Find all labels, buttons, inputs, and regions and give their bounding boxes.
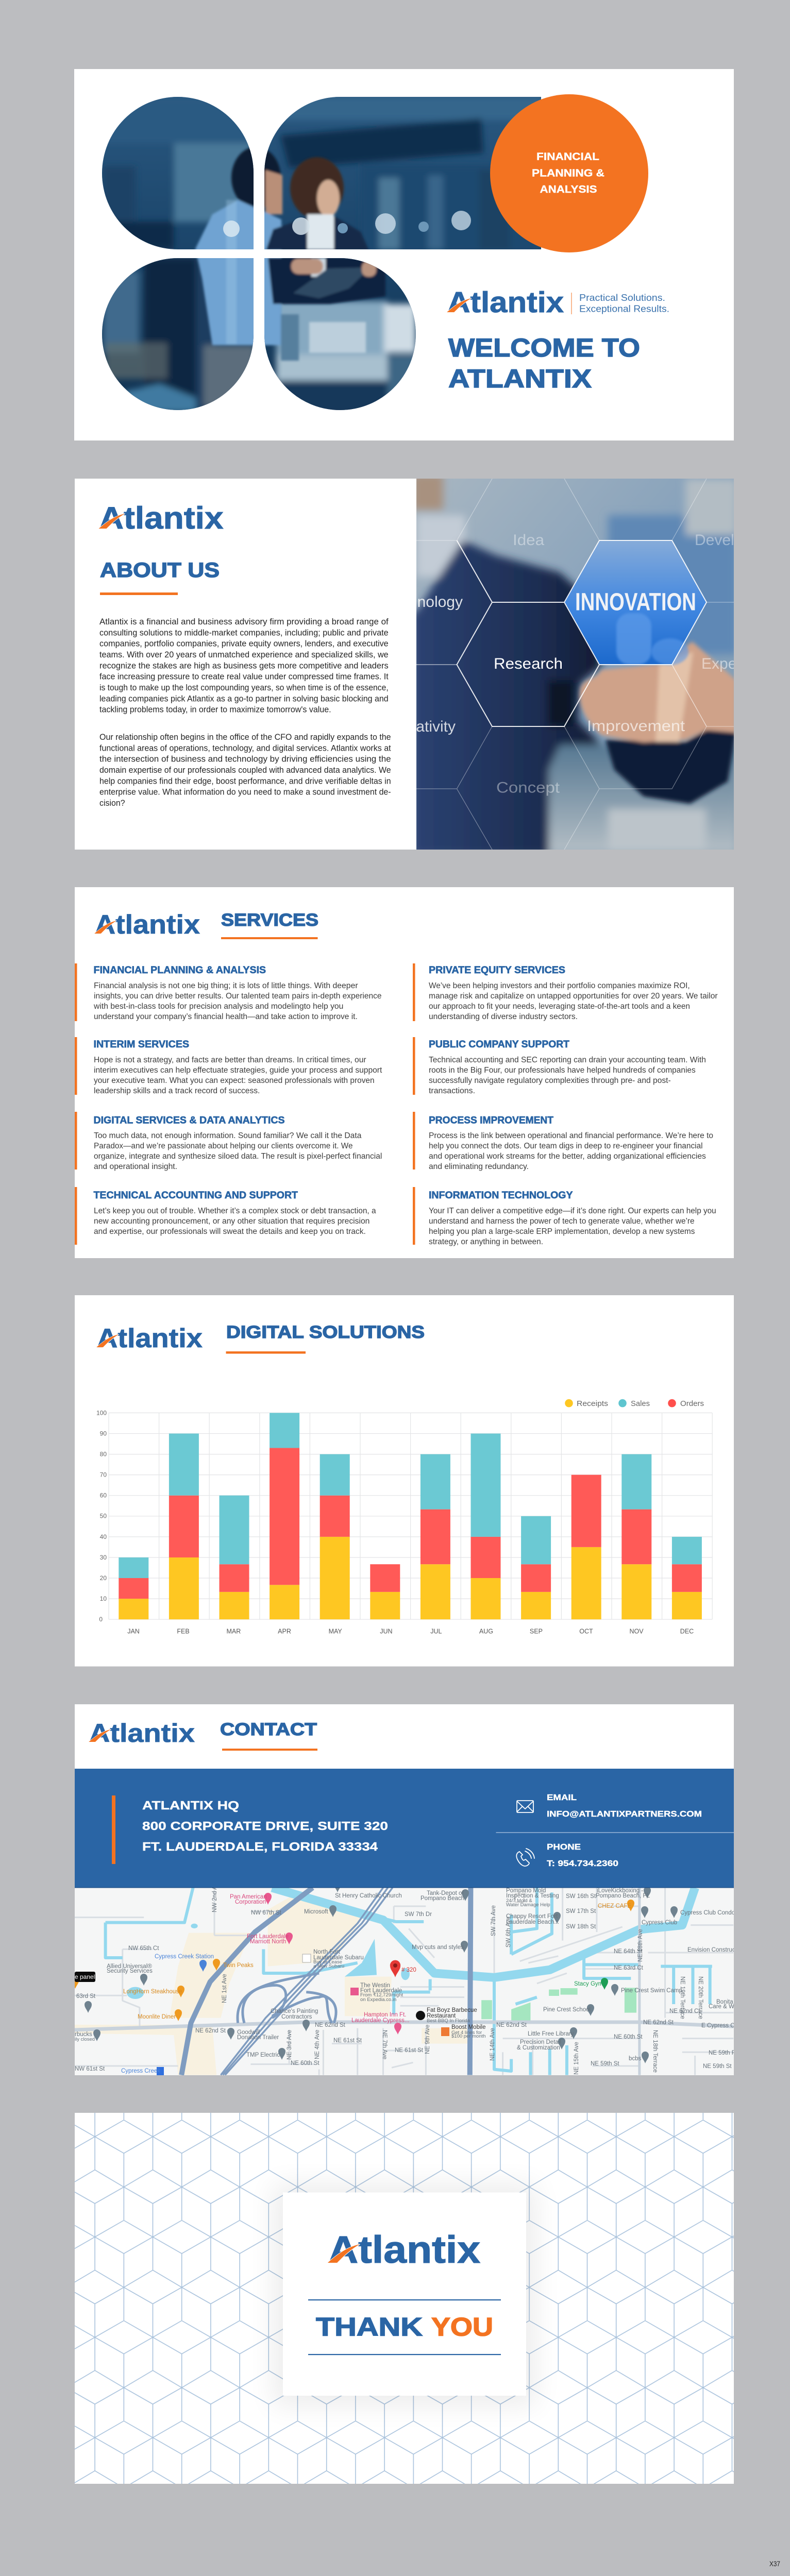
hexagon pattern background [75, 2113, 734, 2484]
map: place labels: NE 7th Ave [381, 2030, 388, 2059]
chart: stacked bars: 100 [96, 1410, 107, 1417]
map: canals [106, 1888, 712, 2075]
hexagon labels: Research [494, 655, 563, 672]
map [72, 1879, 746, 2075]
map: place labels: NE 9th Ave [425, 2025, 431, 2054]
map: place labels: Lauderdale Cypress... [351, 2018, 410, 2024]
service: public company support: successfully navigate regulatory complexities through pre- and post- [429, 1076, 671, 1085]
map: place labels: Restaurant [427, 2013, 456, 2019]
map: place labels: The Westin [360, 1982, 390, 1989]
chart: stacked bars: JUL [430, 1628, 442, 1635]
map: place labels: SW 16th St [566, 1893, 596, 1900]
divider [496, 1832, 734, 1833]
map: place labels: SW 6th Ave [506, 1917, 512, 1947]
text block: about paragraph 1: consulting solutions to middle-market companies, including; public and private [99, 628, 389, 637]
map: place labels: rbucks [75, 2031, 92, 2038]
service: digital services [75, 1112, 382, 1171]
orange circle badge: PLANNING & [532, 168, 604, 179]
map: place labels: NE 59th Pl [709, 2050, 737, 2056]
map: place labels: SW 18th St [566, 1924, 596, 1930]
orange circle badge [490, 94, 648, 252]
map: place labels: on Expedia.co.in [360, 1997, 396, 2003]
service: information technology: understand and harness the power of tech to generate value, whether we’re [429, 1217, 695, 1226]
map: place labels: NE 61st St [333, 2038, 362, 2044]
chart: stacked bars [96, 1410, 712, 1635]
hexagon labels: Technology [384, 594, 463, 611]
text block: about paragraph 2: functional areas of operations, technology, and digital services. Atlantix works at [99, 743, 391, 753]
map: place labels: Pompano Beach [421, 1895, 464, 1902]
logo: Atlantix [89, 1718, 195, 1748]
chart: stacked bars: 60 [100, 1492, 107, 1499]
service: process improvement: help you connect the dots. Our team digs in deep to re-engineer your financial [429, 1142, 703, 1150]
service: private equity [413, 963, 718, 1021]
logo: Atlantix [99, 501, 224, 535]
map: place labels: Pompano Beach, FL [596, 1893, 650, 1899]
map: place labels: Contractors [281, 2014, 312, 2020]
heading: contact: CONTACT [220, 1720, 317, 1739]
text block: about paragraph 2: cision? [99, 799, 125, 808]
text block: about paragraph 1: recognize the stakes are high as business gets more competitive and leaders [99, 661, 389, 670]
address block [142, 1799, 388, 1853]
map: place labels: Best BBQ In Florida [427, 2018, 470, 2024]
map: place labels: NE 18th Terrace [652, 2030, 658, 2073]
map: place labels: E Cypress Creek [701, 2023, 746, 2029]
map: place labels: Inspection & Testing [506, 1893, 559, 1899]
chart: stacked bars: 50 [100, 1513, 107, 1520]
map: place labels: NE 62nd St [195, 2028, 226, 2034]
map: pins [72, 1880, 678, 2075]
map: place labels: Marriott North [250, 1939, 286, 1945]
service: interim services: INTERIM SERVICES [94, 1039, 189, 1050]
map: main roads [75, 1888, 733, 2075]
service: public company support: roots in the Big Four, our professionals have helped hundreds of companies [429, 1066, 696, 1075]
chart: stacked bars: APR [278, 1628, 291, 1635]
service: information technology: Your IT can deliver a competitive edge—if it’s done right. Our experts can help you [429, 1207, 716, 1215]
map: place labels: NE 62nd St [315, 2022, 346, 2028]
service: interim services [75, 1037, 382, 1095]
chart: stacked bars: 30 [100, 1554, 107, 1561]
map: place labels: Chance's Painting [271, 2008, 318, 2014]
map: place labels: SW 17th St [566, 1908, 596, 1914]
map: place labels: NE 60th St [614, 2034, 643, 2040]
service: technical accounting: and expertise, our professionals will sweat the details and keep you on track. [94, 1227, 366, 1236]
map: place labels: NW 67th St [251, 1910, 282, 1916]
map: place labels: Lauderdale Beach... [506, 1919, 559, 1925]
text block: about paragraph 1: companies, portfolio companies, private equity owners, lenders, and executive [99, 639, 389, 649]
chart: stacked bars: 20 [100, 1574, 107, 1582]
map: place labels: iLoveKickboxing - [597, 1888, 643, 1894]
text block: about paragraph 2: the intersection of business and technology by driving efficiencies using the [99, 755, 391, 764]
chart: stacked bars: 0 [99, 1616, 103, 1623]
legend: Receipts [577, 1399, 608, 1408]
page marker: X37 [769, 2560, 780, 2568]
map: place labels: Moonlite Diner [138, 2014, 176, 2020]
map: place labels: Cypress Club [642, 1920, 677, 1926]
text block: about paragraph 2: enterprise value. What information do you need to make a sound investment de- [99, 788, 391, 797]
address block: ATLANTIX HQ [142, 1799, 239, 1812]
map: place labels: 24/7 Mold & [506, 1898, 532, 1904]
logo: Atlantix with tagline: Exceptional Results. [579, 304, 669, 314]
map: place labels: LongHorn Steakhouse [123, 1989, 182, 1995]
map: place labels: NE 59th St [591, 2061, 619, 2067]
service: digital services: and operational insight. [94, 1162, 177, 1171]
map: place labels: NE 62nd St [496, 2022, 527, 2028]
phone block [547, 1843, 618, 1868]
orange circle badge: ANALYSIS [540, 184, 597, 195]
map: place labels: NE 1st Ave [222, 1974, 228, 2003]
service: information technology [413, 1187, 716, 1246]
map: place labels: Twin Peaks [223, 1962, 254, 1969]
photo: team in clover-shaped cutouts [102, 97, 545, 413]
legend: Sales [631, 1399, 650, 1408]
rule top [308, 2299, 501, 2300]
map: place labels: Care & Wa [709, 2004, 737, 2010]
heading: about us: ABOUT US [100, 559, 220, 582]
chart: stacked bars: MAR [227, 1628, 241, 1635]
logo: Atlantix [97, 1324, 203, 1353]
chart: stacked bars: OCT [579, 1628, 593, 1635]
underline [222, 1749, 317, 1751]
text block: about paragraph 1 [99, 617, 389, 715]
service: information technology: strategy, or anything in between. [429, 1238, 543, 1246]
map: place labels: Water Damage Help [506, 1902, 550, 1908]
map: place labels: Get 4 lines for [451, 2030, 482, 2036]
service: private equity: manage risk and capitalize on untapped opportunities for over 20 years. We tailor [429, 992, 718, 1001]
map: place labels: ily closed [75, 2037, 95, 2042]
chart: stacked bars: 40 [100, 1533, 107, 1540]
card [283, 2193, 526, 2396]
service: technical accounting: TECHNICAL ACCOUNTING AND SUPPORT [94, 1190, 298, 1201]
map: place labels: Cypress Creek Station [155, 1954, 214, 1960]
service: financial planning: FINANCIAL PLANNING & ANALYSIS [94, 965, 266, 976]
service: interim services: your executive team. What you can expect: seasoned professionals with proven [94, 1076, 375, 1085]
service: information technology: INFORMATION TECHNOLOGY [429, 1190, 573, 1201]
map: place labels: Security Services [107, 1968, 153, 1974]
orange circle badge: FINANCIAL [536, 151, 599, 163]
service: financial planning: with best-in-class tools for precision analysis and modelingto help you [93, 1002, 343, 1011]
map: place labels: Cypress Creek [121, 2068, 160, 2074]
email block: EMAIL [547, 1793, 577, 1802]
logo: Atlantix with tagline [447, 286, 669, 318]
text block: about paragraph 1: leading companies pick Atlantix as a go-to partner in solving basic blocking and [99, 694, 389, 703]
map: place labels: Chappy Resort Fort [506, 1913, 558, 1920]
service: private equity: our approach to fit your needs, leveraging state-of-the-art tools and a keen [429, 1002, 690, 1011]
map: place labels: Little Free Library [528, 2031, 574, 2037]
map: place labels: Buy or Lease [313, 1959, 342, 1965]
map: place labels: a New Subaru [313, 1963, 344, 1969]
service: public company support: transactions. [429, 1087, 475, 1095]
service: financial planning [75, 963, 381, 1021]
legend [565, 1399, 704, 1408]
map: place labels: Fort Lauderdale [360, 1988, 402, 1994]
thank you text: THANK [316, 2313, 423, 2342]
map: place labels: # 320 [401, 1967, 416, 1973]
panel: contact [72, 1704, 746, 2075]
logo: Atlantix with tagline: Practical Solutions. [579, 293, 665, 303]
service: process improvement: and operational work streams for the better, adding organizational efficiencies [429, 1152, 706, 1161]
map: place labels: NE 62nd Ct [669, 2008, 700, 2014]
service: technical accounting [75, 1187, 376, 1245]
service: interim services: Hope is not a strategy, and facts are better than dreams. In critical times, our [94, 1056, 366, 1064]
map: land-use patches [75, 1892, 636, 2075]
service: process improvement [413, 1112, 713, 1171]
heading: welcome: WELCOME TO [448, 333, 640, 362]
map: place labels: Pan American [230, 1894, 267, 1900]
map: place labels: Tank-Depot of [427, 1890, 464, 1896]
service: process improvement: PROCESS IMPROVEMENT [429, 1115, 553, 1126]
text block: about paragraph 1: is tough to make up the lost compounding years, so when time is of the essence, [99, 683, 389, 692]
map: place labels: Microsoft [304, 1909, 328, 1915]
text block: about paragraph 2: domain expertise of our professionals coupled with advanced data analytics. We [99, 766, 391, 775]
map: tooltip: e panel [75, 1973, 95, 1980]
map: place labels: NW 65th Ct [128, 1945, 159, 1952]
service: public company support [413, 1037, 706, 1095]
map: place labels: Pompano Mold [506, 1888, 546, 1894]
chart: stacked bars: JAN [127, 1628, 140, 1635]
service: technical accounting: new accounting pronouncement, or any other situation that requires precision [94, 1217, 369, 1226]
map: place labels: NE 4th Ave [314, 2030, 321, 2059]
heading: welcome [448, 333, 640, 393]
service: digital services: Too much data, not enough information. Sound familiar? We call it the Data [94, 1131, 362, 1140]
map: place labels: NW 2nd Ave [212, 1879, 218, 1912]
map: place labels: Lauderdale Subaru [313, 1955, 364, 1961]
map: place labels: NE 3rd Ave [287, 2030, 293, 2060]
service: process improvement: and eliminating redundancy. [429, 1162, 529, 1171]
logo: Atlantix [328, 2228, 480, 2271]
service: private equity: We’ve been helping investors and their portfolio companies maximize ROI, [429, 981, 690, 990]
rule bottom [308, 2354, 501, 2355]
text block: about paragraph 1: tackling problems today, in order to maximize tomorrow's value. [99, 705, 331, 715]
icon: phone [516, 1849, 534, 1866]
map: place labels: Fat Boyz Barbecue [427, 2007, 477, 2013]
hexagon labels: Expert [701, 655, 746, 672]
underline [100, 592, 178, 595]
map: minor streets [75, 1888, 733, 2075]
service: digital services: organize, integrate and synthesize siloed data. The result is pixel-perfect financial [94, 1152, 382, 1161]
service: digital services: Paradox—and we’re passionate about helping our clients overcome it. We [94, 1142, 352, 1150]
chart: stacked bars: FEB [177, 1628, 190, 1635]
map: place labels: NE 15th Ave [574, 2042, 580, 2075]
phone block: PHONE [547, 1843, 581, 1852]
map: place labels: Corporation [235, 1899, 266, 1905]
map: place labels: 63rd St [76, 1993, 96, 1999]
map: place labels: Cypress Club Condo [680, 1910, 735, 1916]
map: place labels [75, 1879, 746, 2075]
map: place labels: bcbs [629, 2056, 642, 2062]
map: place labels: Mvp cuts and styles [412, 1944, 464, 1951]
email block: INFO@ATLANTIXPARTNERS.COM [547, 1810, 702, 1819]
panel: thank you [75, 2113, 734, 2484]
map: place labels: NE 59th St [703, 2063, 732, 2070]
service: digital services: DIGITAL SERVICES & DATA ANALYTICS [94, 1115, 284, 1126]
map: place labels: Fort Lauderdale [247, 1934, 289, 1940]
map: place labels: From ₹12,729/night [360, 1992, 404, 1998]
map: place labels: NE 63rd Ct [614, 1965, 644, 1971]
map: place labels: NE 14th Ave [490, 2028, 496, 2061]
icon: envelope [517, 1801, 533, 1812]
chart: stacked bars: 70 [100, 1471, 107, 1479]
service: interim services: interim executives can help effectuate strategies, guide your process and support [94, 1066, 382, 1075]
logo: Atlantix with tagline: Atlantix [447, 286, 564, 318]
contact band [75, 1769, 734, 1888]
service: private equity: understanding of diverse industry sectors. [429, 1012, 578, 1021]
map: place labels: NE 60th St [291, 2060, 320, 2066]
heading: welcome: ATLANTIX [448, 364, 592, 393]
map: place labels: Boost Mobile [451, 2024, 485, 2030]
heading: services: SERVICES [221, 910, 318, 930]
underline [221, 937, 317, 939]
chart: stacked bars: 10 [100, 1595, 107, 1602]
map: place labels: Stacy Gym [574, 1981, 603, 1987]
map: place labels: NE 61st St [395, 2047, 424, 2054]
panel: services [75, 887, 734, 1258]
address block: 800 CORPORATE DRIVE, SUITE 320 [142, 1819, 388, 1833]
map: place labels: Hampton Inn Ft. [364, 2012, 406, 2018]
panel: digital solutions [75, 1295, 734, 1666]
hexagon labels: Idea [513, 532, 544, 549]
contact band bottom edge [75, 1887, 734, 1888]
text block: about paragraph 1: face increasing pressure to create real value under compressed time frames. It [99, 672, 389, 682]
map: place labels: NE 62nd St [643, 2020, 674, 2026]
chart: stacked bars: SEP [530, 1628, 543, 1635]
hexagon labels: INNOVATION [575, 589, 696, 616]
map: place labels: Donation Trailer [237, 2035, 279, 2041]
text block: about paragraph 2: help companies find their edge, boost performance, and drive verifiable deltas in [99, 776, 391, 786]
map: place labels: NE 18th Ave [637, 1929, 644, 1962]
service: technical accounting: Let’s keep you out of trouble. Whether it’s a complex stock or debt transaction, a [94, 1207, 376, 1215]
legend: Orders [680, 1399, 704, 1408]
map: place labels: SW 7th Dr [405, 1911, 432, 1918]
map: place labels: CHEZ CAFE [598, 1903, 632, 1909]
map: place labels: TMP Electric [246, 2052, 280, 2058]
map: place labels: Allied Universal® [107, 1963, 152, 1970]
map: place labels: NE 64th St [614, 1948, 643, 1955]
chart: stacked bars: JUN [380, 1628, 393, 1635]
service: financial planning: insights, you can drive better results. Our talented team pairs in-depth experience [94, 992, 381, 1001]
map: place labels: NE 19th Terrace [679, 1976, 685, 2019]
map: place labels: $100 per month [451, 2033, 486, 2039]
map: place labels: Bonita S [716, 1999, 739, 2005]
panel: about us [75, 474, 746, 855]
hexagon labels: Creativity [391, 718, 456, 735]
text block: about paragraph 1: Atlantix is a financial and business advisory firm providing a broad range of [99, 617, 389, 626]
address block: FT. LAUDERDALE, FLORIDA 33334 [142, 1840, 378, 1853]
service: financial planning: Financial analysis is not one big thing; it is lots of little things. With deeper [94, 981, 358, 990]
chart: stacked bars: NOV [629, 1628, 644, 1635]
service: financial planning: understand your company’s financial health—and take action to improve it. [94, 1012, 358, 1021]
text block: about paragraph 1: teams. With over 20 years of unmatched experience and specialized skills, we [99, 650, 389, 659]
phone block: T: 954.734.2360 [547, 1859, 618, 1868]
photo: innovation hexagons [416, 479, 734, 850]
chart: stacked bars: DEC [680, 1628, 694, 1635]
map: place labels: St Henry Catholic Church [335, 1893, 402, 1899]
text block: about paragraph 2: Our relationship often begins in the office of the CFO and rapidly expands to the [99, 733, 391, 742]
thank you text [316, 2313, 493, 2342]
panel: welcome [74, 69, 734, 440]
map: place labels: SW 7th Ave [491, 1905, 497, 1936]
service: public company support: Technical accounting and SEC reporting can drain your accounting team. With [429, 1056, 706, 1064]
thank you text: YOU [431, 2313, 493, 2342]
email block [547, 1793, 702, 1819]
map: tooltip [75, 1972, 95, 1982]
map: place labels: & Customization [517, 2045, 560, 2051]
map: place labels: NE 20th Terrace [697, 1976, 703, 2019]
chart: stacked bars: 90 [100, 1430, 107, 1437]
hexagon labels: Concept [496, 779, 560, 796]
chart: stacked bars: MAY [329, 1628, 342, 1635]
service: information technology: helping you plan a large-scale ERP implementation, develop a new systems [429, 1227, 695, 1236]
service: private equity: PRIVATE EQUITY SERVICES [429, 965, 565, 976]
map: place labels: Envision Construction [687, 1947, 745, 1953]
map: place labels: Precision Detail [520, 2039, 561, 2045]
map: place labels: Pine Crest Swim Camp [621, 1988, 682, 1994]
accent bar [112, 1795, 115, 1864]
hexagon labels: Devel [695, 532, 734, 549]
service: public company support: PUBLIC COMPANY SUPPORT [429, 1039, 569, 1050]
map: place labels: Pine Crest School [543, 2007, 591, 2013]
chart: stacked bars: AUG [479, 1628, 493, 1635]
text block: about paragraph 2 [99, 733, 391, 808]
service: interim services: leadership skills and a track record of success. [94, 1087, 260, 1095]
underline [226, 1351, 306, 1354]
map: place labels: Goodwill [237, 2029, 260, 2036]
service: process improvement: Process is the link between operational and financial performance. We’re here to [429, 1131, 713, 1140]
heading: digital solutions: DIGITAL SOLUTIONS [226, 1323, 425, 1342]
hexagon labels [416, 534, 734, 795]
card shadow [273, 2184, 536, 2406]
map: place labels: North Fort [313, 1949, 341, 1955]
hexagon labels: Improvement [587, 718, 685, 735]
chart: stacked bars: 80 [100, 1451, 107, 1458]
logo: Atlantix [95, 910, 200, 939]
map: place labels: NW 61st St [75, 2066, 105, 2072]
hexagon lines [416, 479, 734, 850]
